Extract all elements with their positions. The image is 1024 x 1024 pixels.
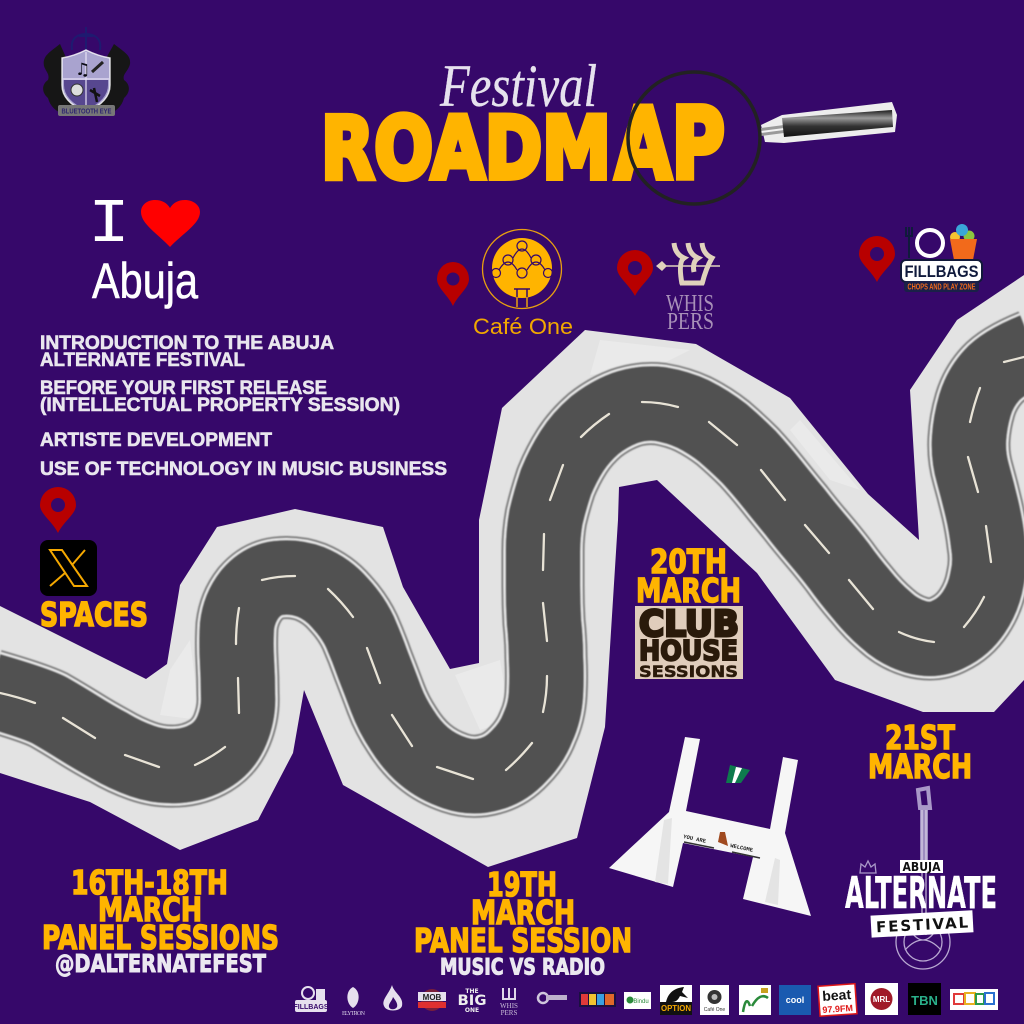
date: 16th-18th March panel sessions: [42, 863, 279, 978]
sponsor: Fillbags: [294, 987, 329, 1012]
crest logo: ♫: [75, 60, 90, 80]
date: 16th-18th March panel sessions: MARCH: [98, 890, 202, 929]
sponsor: MRL: MRL: [873, 995, 890, 1004]
date: 16th-18th March panel sessions: PANEL SESSIONS: [42, 918, 279, 957]
session list: BEFORE YOUR FIRST RELEASE: [40, 378, 327, 399]
date: 21st March: MARCH: [868, 747, 972, 786]
session list: USE OF TECHNOLOGY IN MUSIC BUSINESS: [40, 459, 447, 480]
session list: INTRODUCTION TO THE ABUJA: [40, 333, 334, 354]
sponsor: Option: OPTION: [661, 1004, 691, 1013]
sponsor: Elytron: ELYTRON: [342, 1011, 366, 1017]
date: 20th March: MARCH: [636, 571, 741, 610]
logo: Club House Sessions: [635, 604, 743, 681]
logo: Club House Sessions: SESSIONS: [639, 662, 738, 681]
sponsor: Elytron: [342, 987, 366, 1017]
sponsor: Cafe One: Café One: [704, 1007, 725, 1013]
road: [0, 350, 1024, 779]
crest logo: BLUETOOTH EYE: [62, 108, 112, 116]
date: 21st March: [868, 718, 972, 786]
subtitle: Festival: Festival: [439, 53, 597, 119]
I love Abuja: I: [88, 189, 130, 260]
sponsor logos: [294, 983, 998, 1017]
session list: ARTISTE DEVELOPMENT: [40, 430, 272, 451]
sponsor: Whispers: PERS: [501, 1009, 517, 1017]
logo: Abuja Alternate Festival: ABUJA: [902, 860, 941, 874]
sponsor: MRL: [865, 983, 898, 1015]
sponsor: green on white: [624, 992, 651, 1009]
logo: Cafe One: Café One: [473, 314, 573, 339]
date: 16th-18th March panel sessions: 16TH-18TH: [71, 863, 228, 902]
logo: Whispers: PERS: [667, 309, 714, 335]
sponsor: Whispers: WHIS: [500, 1002, 518, 1010]
icon: Nigerian flag: [726, 765, 750, 783]
logo: Fillbags: FILLBAGS: [904, 262, 978, 281]
crest logo: [43, 27, 130, 116]
sponsor: flame: [383, 985, 402, 1010]
logo: Whispers: [656, 243, 720, 335]
sponsor: Mob Urban: MOB: [423, 993, 442, 1002]
handle: @DALTERNATEFEST: [55, 949, 266, 978]
sponsor: colourful boxes: [950, 989, 998, 1010]
sponsor: green script: [739, 985, 771, 1015]
sponsor: The Beat: [818, 984, 857, 1016]
I love Abuja: Abuja: [92, 253, 198, 309]
sponsor: colourful: [579, 992, 616, 1007]
icon: location pin spaces: [40, 487, 76, 533]
sponsor: The Big One: [458, 988, 486, 1014]
session list: (INTELLECTUAL PROPERTY SESSION): [40, 395, 400, 416]
label: spaces: SPACES: [40, 595, 148, 634]
session title: MUSIC VS RADIO: [440, 956, 605, 980]
logo: Cafe One: [473, 230, 573, 339]
icon: location pin cafe: [437, 262, 469, 306]
sponsor: The Big One: ONE: [465, 1007, 479, 1014]
sponsor: green on white: Bindu: [633, 999, 649, 1005]
sponsor: Option: [660, 985, 692, 1015]
sponsor: Fillbags: FILLBAGS: [294, 1004, 329, 1011]
logo: Fillbags: CHOPS AND PLAY ZONE: [908, 282, 976, 292]
logo: Abuja Alternate Festival: [845, 788, 997, 969]
title: [321, 53, 725, 202]
icon: location pin whispers: [617, 250, 653, 296]
date: 20th March: [636, 542, 741, 610]
session list: ALTERNATE FESTIVAL: [40, 350, 245, 371]
sponsor: Cool: cool: [786, 995, 804, 1005]
logo: Fillbags: [901, 224, 982, 292]
heading: Roadmap: ROADM: [321, 99, 611, 199]
date: 19th March panel session: 19TH: [487, 865, 557, 904]
sponsor: The Beat: 97.9FM: [822, 1003, 853, 1015]
logo: Club House Sessions: HOUSE: [639, 634, 738, 667]
sponsor: Mob Urban: [418, 989, 446, 1011]
session list: [40, 333, 447, 480]
date: 20th March: 20TH: [650, 542, 727, 581]
illustration: Abuja gate: YOU ARE: [683, 833, 707, 845]
illustration: Abuja gate: WELCOME: [730, 842, 754, 854]
date: 21st March: 21ST: [885, 718, 955, 757]
magnifying glass: [628, 72, 897, 204]
logo: Club House Sessions: CLUB: [639, 604, 739, 645]
I love Abuja: [88, 189, 200, 309]
sponsor: The Beat: beat: [822, 986, 852, 1004]
heading: magnified letters: AP: [615, 88, 725, 202]
sponsor: Whispers: [500, 988, 518, 1017]
icon: location pin fillbags: [859, 236, 895, 282]
torn paper behind road: [0, 275, 1024, 867]
sponsor: Cafe One: [700, 985, 729, 1015]
date: 19th March panel session: MARCH: [471, 893, 575, 932]
date: 19th March panel session: [414, 865, 632, 980]
logo: Abuja Alternate Festival: FESTIVAL: [876, 914, 969, 936]
sponsor: gear: [538, 993, 567, 1003]
icon: X app: [40, 540, 97, 596]
sponsor: TBN: [908, 983, 941, 1015]
date: 19th March panel session: PANEL SESSION: [414, 921, 632, 960]
icon: heart: [141, 200, 200, 247]
logo: Whispers: WHIS: [666, 291, 714, 317]
sponsor: The Big One: BIG: [458, 993, 486, 1009]
sponsor: TBN: TBN: [911, 993, 938, 1008]
sponsor: The Big One: THE: [465, 988, 479, 995]
illustration: Abuja gate: [609, 737, 811, 916]
sponsor: Cool: [779, 985, 811, 1015]
guitar: [896, 788, 950, 969]
